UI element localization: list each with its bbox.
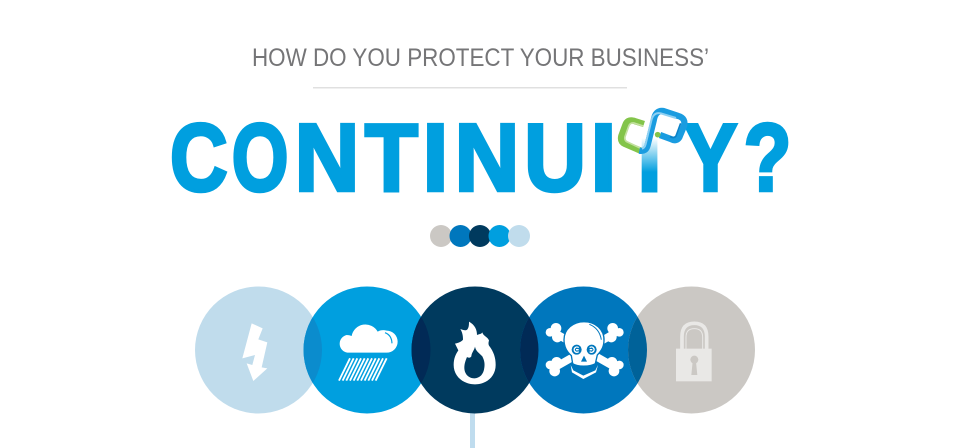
dot row bbox=[430, 225, 530, 247]
icon: skull and crossbones bbox=[546, 322, 624, 379]
title: continuity: T bbox=[623, 104, 676, 211]
title: continuity: T bbox=[365, 104, 418, 211]
overlap: lightning and storm bbox=[304, 317, 322, 383]
dot: pale blue bbox=[508, 225, 530, 247]
circle: security bbox=[628, 286, 755, 414]
circle: fire bbox=[412, 286, 538, 414]
connector line bbox=[470, 412, 475, 448]
overlap: fire and poison bbox=[520, 317, 538, 383]
subtitle: HOW DO YOU PROTECT YOUR BUSINESS’ bbox=[252, 44, 709, 72]
dot: grey bbox=[430, 225, 452, 247]
circle: storm bbox=[304, 286, 430, 414]
title: continuity: ? bbox=[744, 104, 791, 211]
title: continuity: Y bbox=[684, 104, 737, 211]
circle: poison bbox=[520, 286, 647, 414]
title: continuity: N bbox=[295, 104, 359, 211]
dot: mid blue bbox=[450, 225, 472, 247]
divider bbox=[313, 87, 627, 88]
icon: padlock bbox=[676, 323, 712, 381]
overlap: poison and security bbox=[628, 316, 647, 384]
circle: lightning bbox=[195, 286, 322, 414]
overlap: storm and fire bbox=[412, 316, 430, 384]
dot: bright blue bbox=[488, 225, 510, 247]
title: continuity: I bbox=[422, 104, 448, 211]
icon: lightning bolt bbox=[242, 323, 267, 381]
circle row bbox=[195, 286, 755, 414]
title: continuity bbox=[170, 104, 791, 211]
icon: flame bbox=[454, 322, 496, 384]
icon: rain cloud bbox=[339, 324, 398, 381]
icon: cp logo bbox=[621, 111, 684, 151]
title: continuity: N bbox=[455, 104, 519, 211]
dot: navy bbox=[469, 225, 491, 247]
infographic canvas bbox=[172, 48, 788, 448]
title: continuity: U bbox=[524, 104, 586, 211]
title: continuity: C bbox=[170, 104, 228, 211]
title: continuity: O bbox=[232, 104, 288, 211]
title: continuity: I bbox=[590, 104, 616, 211]
